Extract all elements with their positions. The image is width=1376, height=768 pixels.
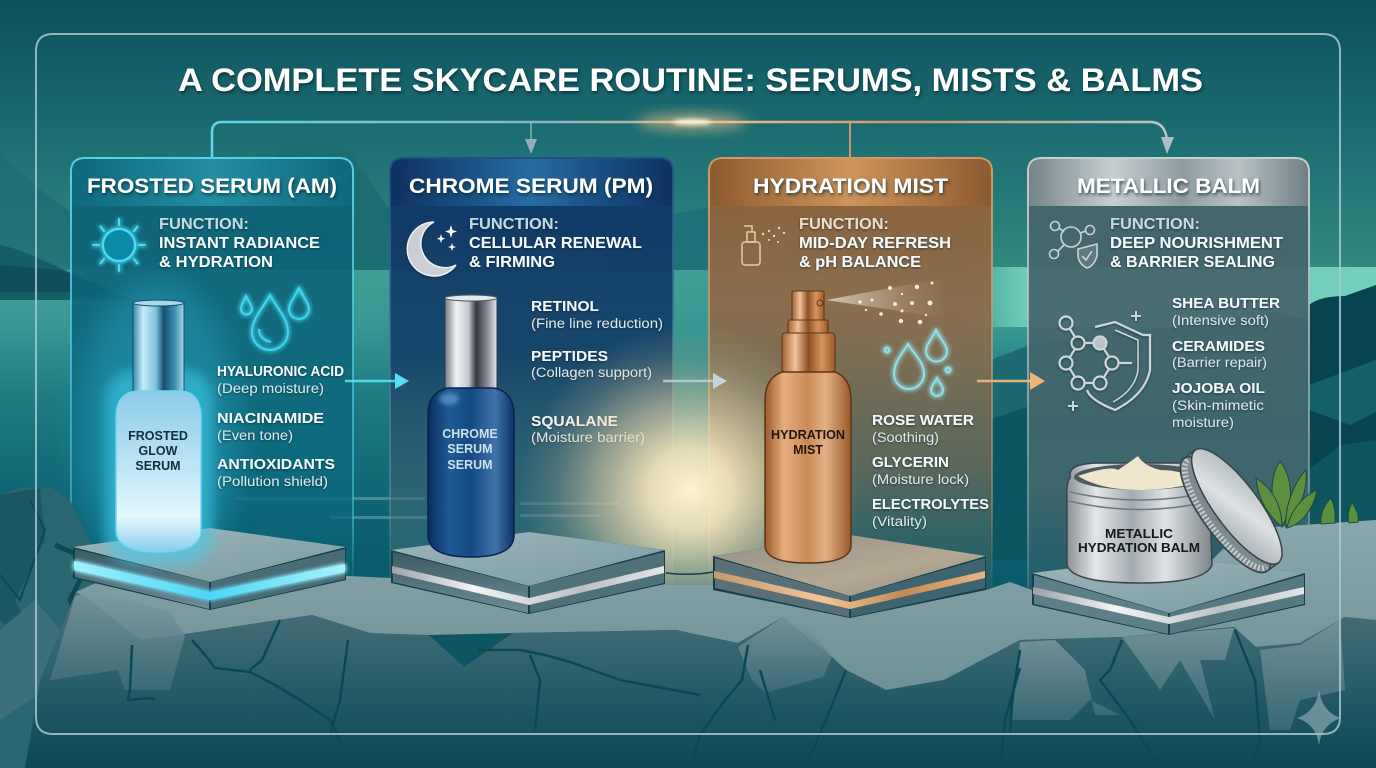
icon: sun <box>93 219 145 271</box>
heading: METALLIC BALM <box>1077 175 1260 198</box>
function text: MID-DAY REFRESH <box>799 235 951 252</box>
ingredients <box>1172 296 1281 430</box>
function text: FUNCTION: <box>469 216 559 233</box>
ingredients: (Deep moisture) <box>217 381 324 396</box>
function text: & FIRMING <box>469 254 555 271</box>
bottle: frosted glow serum <box>105 300 213 565</box>
icon: molecule and shield large <box>1060 311 1150 411</box>
jar label: HYDRATION BALM <box>1078 541 1200 555</box>
function text: FUNCTION: <box>1110 216 1200 233</box>
ingredients: (Soothing) <box>872 430 939 445</box>
function text: & pH BALANCE <box>799 254 921 271</box>
function text <box>469 216 642 271</box>
icon: spray bottle <box>742 226 785 265</box>
icon: mist droplets <box>826 278 950 396</box>
jar label: METALLIC <box>1105 527 1173 541</box>
jar: metallic hydration balm <box>1067 456 1212 583</box>
bottle label: SERUM <box>447 442 493 456</box>
ingredients: (Vitality) <box>872 514 927 529</box>
platform: chrome serum <box>391 532 665 614</box>
bottle: chrome serum <box>428 295 514 557</box>
ingredients: CERAMIDES <box>1172 339 1265 355</box>
function text: INSTANT RADIANCE <box>159 235 320 252</box>
background landscape <box>0 0 1376 607</box>
heading: CHROME SERUM (PM) <box>409 175 653 198</box>
bottle label: SERUM <box>135 459 181 473</box>
function text: FUNCTION: <box>159 216 249 233</box>
title: A COMPLETE SKYCARE ROUTINE: SERUMS, MISTS & BALMS <box>178 62 1203 98</box>
platform: metallic balm <box>1032 556 1305 635</box>
ingredients: SQUALANE <box>531 414 618 430</box>
function text <box>1110 216 1284 271</box>
icon: plant <box>1256 461 1358 528</box>
platform: frosted serum <box>73 528 346 610</box>
ingredients: (Moisture barrier) <box>531 430 645 445</box>
ingredients <box>531 299 663 445</box>
ingredients: JOJOBA OIL <box>1172 381 1265 397</box>
function text: FUNCTION: <box>799 216 889 233</box>
jar lid <box>1166 437 1296 584</box>
ingredients: (Skin-mimetic <box>1172 398 1264 413</box>
bottle label: HYDRATION <box>771 428 845 442</box>
bottle label: GLOW <box>139 444 178 458</box>
heading: HYDRATION MIST <box>753 175 948 198</box>
arrows between panels <box>345 372 1045 574</box>
ingredients: PEPTIDES <box>531 349 608 365</box>
bottle label: SERUM <box>447 458 493 472</box>
ingredients <box>872 413 989 529</box>
ingredients: SHEA BUTTER <box>1172 296 1281 312</box>
ingredients: GLYCERIN <box>872 455 949 471</box>
bottle: hydration mist <box>765 291 851 563</box>
heading: FROSTED SERUM (AM) <box>87 175 337 198</box>
ingredients: ROSE WATER <box>872 413 975 429</box>
ingredients: moisture) <box>1172 415 1234 430</box>
function text: & HYDRATION <box>159 254 273 271</box>
ingredients: (Pollution shield) <box>217 474 328 489</box>
bottle label: CHROME <box>442 427 498 441</box>
ingredients: (Collagen support) <box>531 365 652 380</box>
ingredients: ELECTROLYTES <box>872 497 989 513</box>
ingredients: NIACINAMIDE <box>217 411 324 427</box>
ingredients: ANTIOXIDANTS <box>217 457 335 473</box>
bottle label: MIST <box>793 443 823 457</box>
icon: water drops <box>241 288 309 350</box>
function text: & BARRIER SEALING <box>1110 254 1275 271</box>
icon: sparkle <box>1297 690 1341 745</box>
panel: metallic balm <box>1028 158 1309 598</box>
ingredients: (Barrier repair) <box>1172 355 1267 370</box>
ingredients: HYALURONIC ACID <box>217 364 344 380</box>
panel: chrome serum <box>390 158 673 598</box>
bottle label: FROSTED <box>128 429 188 443</box>
ingredients: (Even tone) <box>217 428 293 443</box>
panel: hydration mist <box>709 158 992 598</box>
connector line with arrows <box>212 113 1174 158</box>
ingredients <box>217 364 344 489</box>
ingredients: (Moisture lock) <box>872 472 969 487</box>
ingredients: (Fine line reduction) <box>531 316 663 331</box>
ingredients: (Intensive soft) <box>1172 313 1269 328</box>
function text: DEEP NOURISHMENT <box>1110 235 1284 252</box>
function text: CELLULAR RENEWAL <box>469 235 642 252</box>
panel: frosted serum <box>71 158 353 598</box>
ingredients: RETINOL <box>531 299 599 315</box>
icon: moon and stars <box>407 222 457 276</box>
sunlight glow <box>520 325 860 655</box>
platform: hydration mist <box>713 535 986 618</box>
function text <box>159 216 320 271</box>
function text <box>799 216 951 271</box>
icon: molecule and shield small <box>1050 222 1097 268</box>
rocks and ledge <box>0 487 1376 768</box>
